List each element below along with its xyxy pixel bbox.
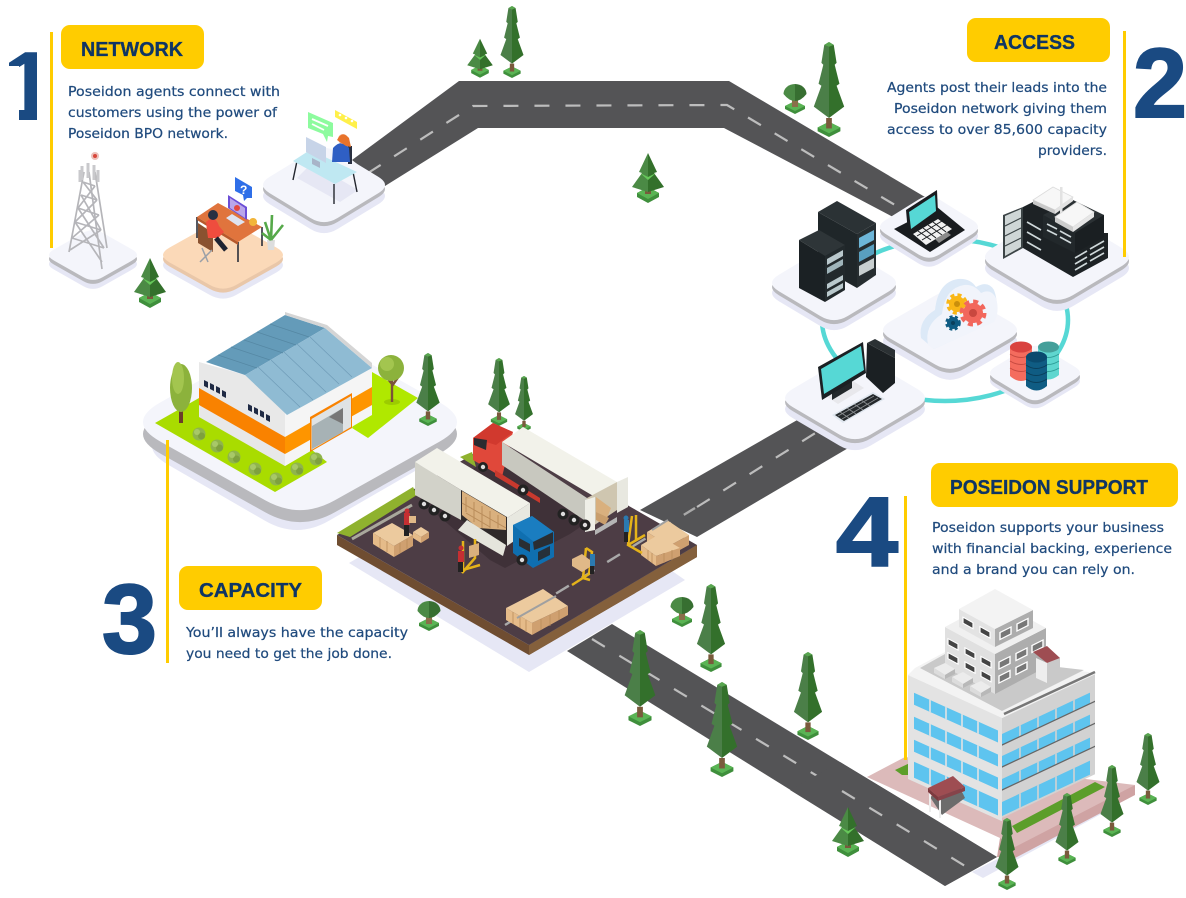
platform: databases <box>990 346 1080 408</box>
text: support description: with financial backing, experience <box>932 542 1172 557</box>
roof tower upper <box>959 589 1033 647</box>
platform: computer <box>785 357 925 450</box>
dock shadow <box>349 464 685 672</box>
icon: blue truck <box>415 448 554 568</box>
icon: rack servers with routers <box>1003 187 1108 277</box>
cargo: pallet stack left <box>373 523 413 557</box>
icon: teal cylinder <box>1038 342 1059 380</box>
tree: fir by the road <box>832 807 864 857</box>
panel: step 2 access <box>887 18 1186 257</box>
forklift and worker: left <box>458 539 480 573</box>
step number 1: 1 <box>2 31 56 141</box>
cargo: pallet stack front <box>506 589 568 635</box>
platform: warehouse yard <box>143 334 457 530</box>
tree: under dock right <box>670 597 694 627</box>
heading pill: capacity: CAPACITY <box>199 580 303 602</box>
tree: pine top right <box>814 42 844 137</box>
icon: server racks <box>799 201 876 302</box>
panel: loading dock <box>337 435 697 655</box>
tree: pine road 2 <box>625 630 655 726</box>
building left face <box>908 675 1002 821</box>
tree: building pine 2 <box>1100 765 1124 837</box>
roof units <box>934 663 991 697</box>
text: network description: Poseidon agents connect with <box>68 85 280 100</box>
icon: navy gear <box>946 316 960 330</box>
icon: seated agent at desk: ? <box>240 183 247 197</box>
building right face <box>1002 674 1095 818</box>
text: network description: Poseidon BPO network. <box>68 127 228 142</box>
cargo: small pallet <box>413 527 429 543</box>
text: capacity description: you need to get the job done. <box>186 647 392 662</box>
step number 2: 2 <box>1133 28 1186 138</box>
step number 3: 3 <box>102 564 157 674</box>
heading pill: access <box>967 18 1110 62</box>
platform: laptop <box>880 196 978 267</box>
heading pill: poseidon support <box>931 463 1178 507</box>
accent rule 3 <box>166 440 169 663</box>
platform: cloud <box>883 291 1017 380</box>
icon: warehouse building <box>199 312 372 466</box>
icon: office building <box>908 589 1095 821</box>
road: bottom segment <box>567 624 997 886</box>
text: support description: Poseidon supports your business <box>932 521 1164 536</box>
tree: round top right <box>784 84 806 114</box>
text: support description <box>932 521 1172 578</box>
icon: laptop <box>894 190 965 252</box>
text: access description: Agents post their leads into the <box>887 81 1107 96</box>
platform: cell tower <box>49 230 137 289</box>
text: access description <box>887 81 1107 159</box>
icon: navy cylinder <box>1026 352 1047 390</box>
platform: desk floor <box>163 221 283 299</box>
road overlap at plaza <box>790 762 997 886</box>
roof hut <box>1033 646 1060 683</box>
cargo: pallet stack right front <box>641 535 680 566</box>
step number 4: 4 <box>836 477 898 587</box>
road dashes at plaza <box>842 791 970 869</box>
text: capacity description <box>185 626 408 662</box>
forklift and worker: right <box>624 515 645 553</box>
icon: red truck <box>473 423 628 535</box>
panel: step 3 capacity <box>102 440 408 674</box>
text: network description: customers using the power of <box>68 106 277 121</box>
text: support description: and a brand you can rely on. <box>932 563 1135 578</box>
icon: yellow gear <box>948 295 966 313</box>
bushes along the warehouse <box>192 428 322 486</box>
road: middle segment <box>640 415 850 537</box>
tree: pines behind trucks 2 <box>515 376 533 432</box>
tree: pine road 4 <box>707 682 737 777</box>
entrance canopy <box>928 776 965 818</box>
text: access description: Poseidon network giving them <box>894 102 1107 117</box>
panel: step 4 support <box>836 463 1178 760</box>
tree: pines behind trucks 1 <box>488 358 510 426</box>
icon: cell tower <box>69 153 107 269</box>
icon: database cylinders <box>1010 342 1059 390</box>
tree: fir left <box>134 258 166 308</box>
heading pill: network: NETWORK <box>81 39 184 61</box>
worker carrying box <box>404 508 416 536</box>
warehouse lawn <box>155 372 418 492</box>
tree: fir centre <box>632 153 664 203</box>
icon: desktop computer <box>818 339 895 423</box>
tree: pine road 3 <box>794 652 822 740</box>
tree: under dock left <box>418 601 440 631</box>
tree: pine top 1 <box>500 6 524 78</box>
accent rule 2 <box>1123 31 1126 257</box>
tree: building pine 1 <box>1136 733 1160 805</box>
road: top segment <box>352 81 925 218</box>
warehouse door <box>310 393 352 452</box>
tree: building pine 4 <box>995 818 1019 890</box>
roof tower lower <box>945 600 1046 694</box>
text: network description <box>68 85 280 142</box>
icon: red gear <box>962 302 984 324</box>
heading pill: network <box>61 25 204 69</box>
accent rule 1 <box>50 32 53 248</box>
building plaza <box>867 757 1135 878</box>
heading pill: access: ACCESS <box>994 32 1075 54</box>
platform: rack servers <box>985 214 1129 311</box>
tree: building pine 3 <box>1055 793 1079 865</box>
network connection ring <box>822 239 1068 401</box>
forklift and worker: centre <box>572 548 595 585</box>
warehouse windows <box>204 380 270 422</box>
icon: headset agent at glass desk <box>293 110 358 204</box>
icon: cloud with gears <box>921 279 998 349</box>
heading pill: capacity <box>179 566 322 610</box>
heading pill: poseidon support: POSEIDON SUPPORT <box>950 477 1148 499</box>
accent rule 4 <box>904 496 907 760</box>
text: capacity description: You’ll always have the capacity <box>185 626 408 641</box>
text: access description: access to over 85,600 capacity <box>887 123 1107 138</box>
icon: seated agent at desk <box>197 177 283 262</box>
building roof slab <box>908 652 1095 718</box>
tree: warehouse round tree <box>378 355 404 405</box>
tree: warehouse poplar <box>170 362 192 423</box>
tree: pine road 1 <box>697 584 725 672</box>
panel: step 1 network <box>2 25 280 248</box>
icon: red cylinder <box>1010 342 1032 381</box>
tree: warehouse pine <box>416 353 440 426</box>
tree: fir top 2 <box>467 39 493 78</box>
text: access description: providers. <box>1038 144 1107 159</box>
platform: left servers <box>772 246 896 330</box>
cargo: pallet stack right back <box>647 520 689 556</box>
platform: support agent <box>263 148 385 233</box>
